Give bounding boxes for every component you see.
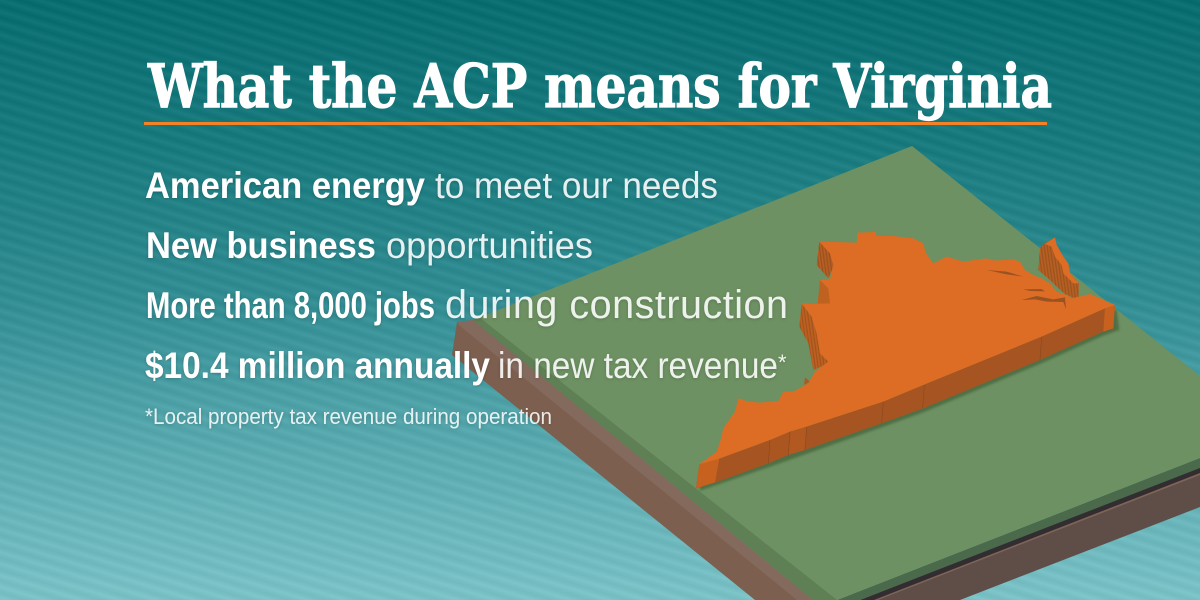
front-right dark layer (860, 467, 1200, 600)
Eastern Shore top edge (1045, 237, 1079, 283)
line 4: in new tax revenue (498, 345, 778, 386)
line 3: during construction (445, 283, 788, 327)
line 2: opportunities (386, 225, 593, 266)
line 3 (146, 283, 788, 327)
wall seams (768, 337, 1042, 463)
line 1 (145, 165, 718, 206)
south front wall (696, 305, 1115, 488)
front-left dark green strip (473, 317, 837, 600)
title underline (144, 122, 1047, 125)
front-right dark green side (837, 458, 1200, 600)
front-right light edge line (860, 467, 1200, 600)
3D map of Virginia (696, 232, 1119, 491)
western walls (799, 242, 834, 385)
benefits list (145, 165, 788, 429)
front-right brown side (876, 473, 1200, 600)
front-left brown side (452, 320, 813, 600)
footnote: *Local property tax revenue during operation (145, 404, 552, 429)
terrain block (452, 146, 1200, 600)
line 4: $10.4 million annually (145, 345, 490, 386)
Eastern Shore walls (1038, 237, 1079, 300)
top face of the state (699, 232, 1115, 464)
line 4: * (778, 350, 787, 375)
line 4 (145, 345, 787, 386)
line 2 (146, 225, 593, 266)
Chesapeake inlets (987, 270, 1066, 309)
line 1: to meet our needs (435, 165, 718, 206)
lighter wall segments (696, 305, 1115, 488)
line 3: More than 8,000 jobs (146, 285, 435, 326)
cast shadow (700, 262, 1119, 491)
line 2: New business (146, 225, 376, 266)
line 1: American energy (145, 165, 425, 206)
green top surface (473, 146, 1200, 600)
front-left light brown strip (457, 320, 813, 600)
